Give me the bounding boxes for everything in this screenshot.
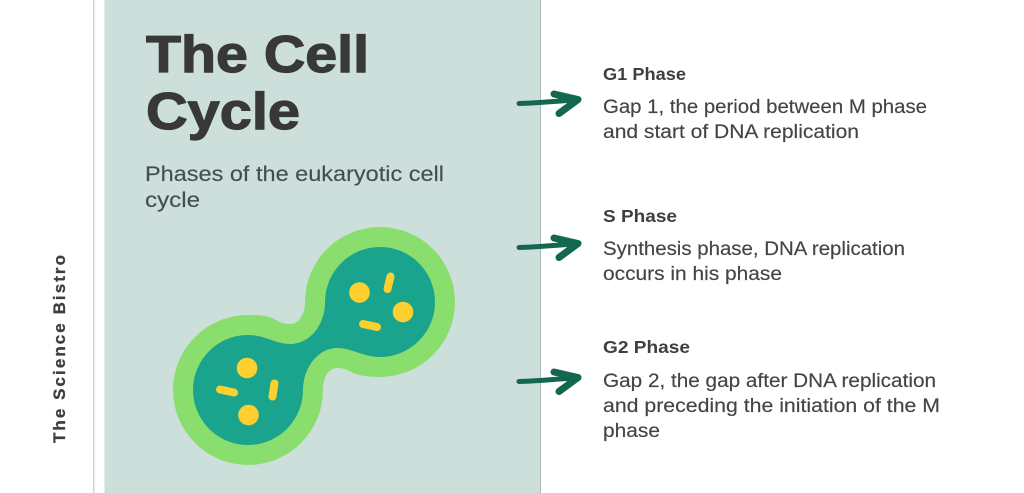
subtitle — [145, 162, 444, 212]
text block: G2 Phase — [603, 337, 940, 442]
organelles — [220, 276, 413, 425]
text block: G2 Phase: phase — [603, 421, 660, 442]
text block: G1 Phase: G1 Phase — [603, 64, 686, 84]
cell membrane — [173, 227, 455, 465]
text block: G1 Phase — [603, 64, 927, 143]
title: The Cell — [146, 26, 369, 84]
text block: G1 Phase: and start of DNA replication — [603, 122, 859, 143]
text block: G2 Phase: G2 Phase — [603, 337, 690, 357]
title — [146, 26, 369, 141]
cell cytoplasm — [193, 247, 435, 445]
subtitle: cycle — [145, 188, 200, 212]
text block: G2 Phase: and preceding the initiation of the M — [603, 396, 940, 417]
text block: G2 Phase: Gap 2, the gap after DNA replication — [603, 371, 936, 392]
text block: S Phase: Synthesis phase, DNA replication — [603, 239, 905, 260]
arrow: G1 — [519, 94, 578, 114]
icon: dividing cell — [173, 227, 455, 465]
text block: S Phase: occurs in his phase — [603, 264, 782, 285]
arrow: G2 — [519, 372, 578, 392]
text block: S Phase: S Phase — [603, 206, 677, 226]
arrow: S — [519, 238, 578, 258]
panel: background — [104, 0, 540, 493]
title: Cycle — [146, 83, 300, 141]
side label: The Science Bistro — [50, 255, 69, 443]
text block: S Phase — [603, 206, 905, 285]
subtitle: Phases of the eukaryotic cell — [145, 162, 444, 186]
text block: G1 Phase: Gap 1, the period between M phase — [603, 97, 927, 118]
